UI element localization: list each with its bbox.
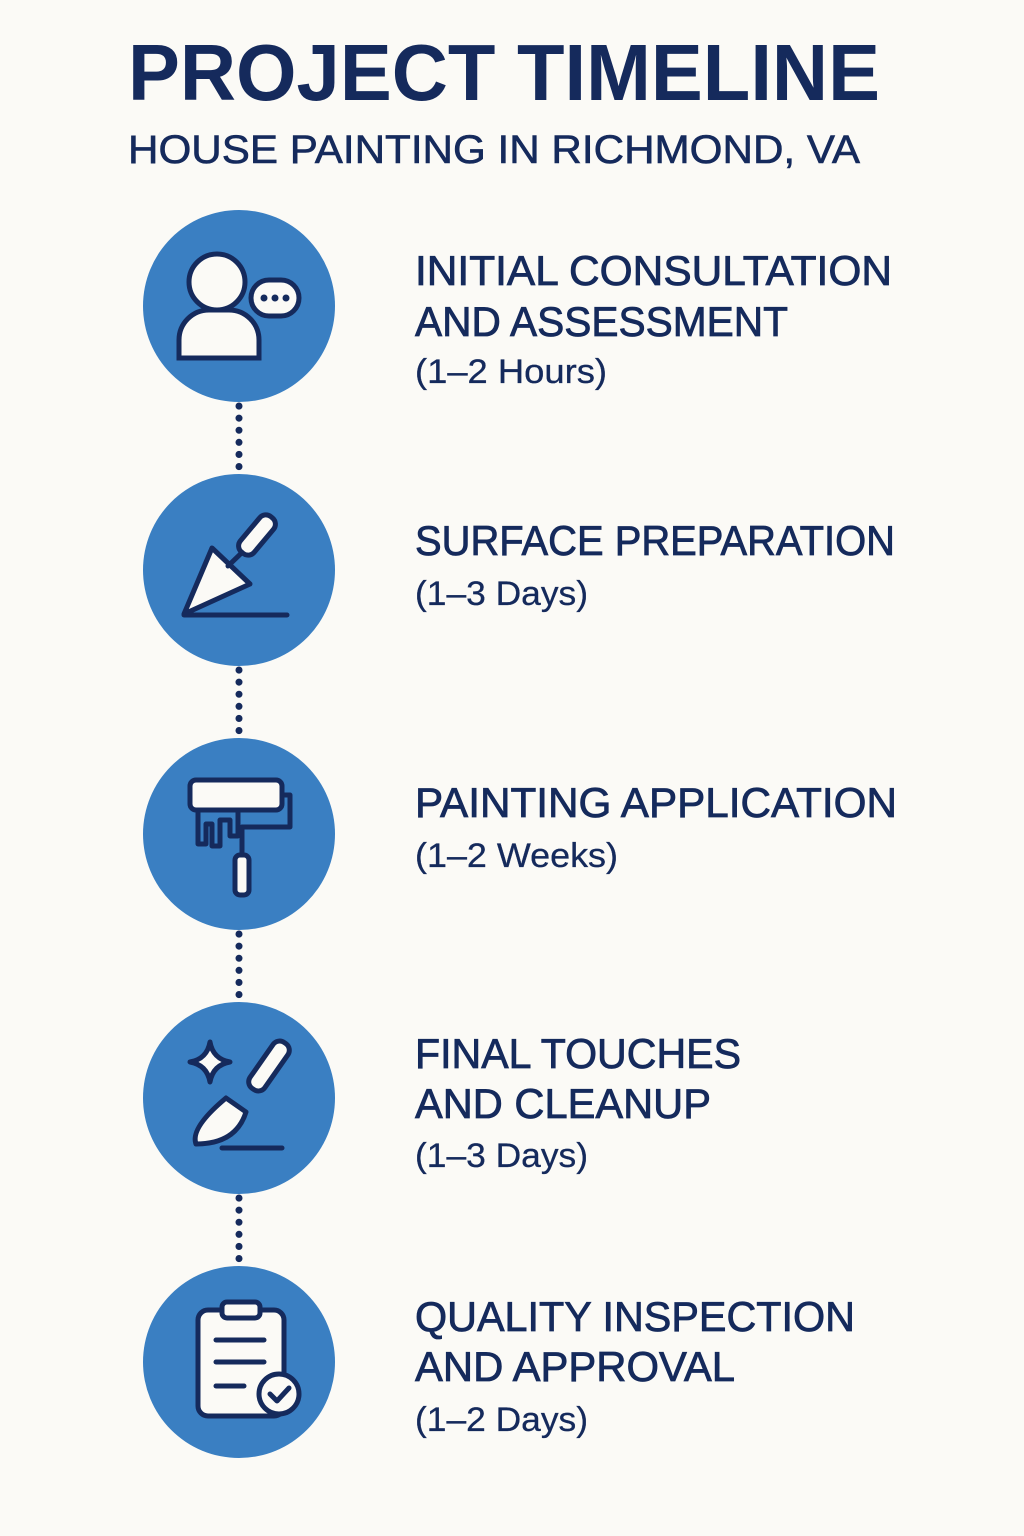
- step 2 text: SURFACE PREPARATION: [415, 517, 895, 564]
- step 4 text: (1–3 Days): [415, 1137, 588, 1175]
- step 5 text: (1–2 Days): [415, 1401, 588, 1439]
- icon: paint roller: [143, 738, 335, 930]
- step 3 text: (1–2 Weeks): [415, 837, 618, 875]
- icon: brush with sparkle: [143, 1002, 335, 1194]
- step 4 text: [415, 1030, 741, 1175]
- step 4 text: AND CLEANUP: [415, 1080, 711, 1127]
- subtitle: HOUSE PAINTING IN RICHMOND, VA: [128, 128, 860, 172]
- step 2 text: (1–3 Days): [415, 575, 588, 613]
- step 1 text: [415, 247, 892, 391]
- title: PROJECT TIMELINE: [128, 28, 880, 117]
- step 5 text: QUALITY INSPECTION: [415, 1293, 855, 1340]
- step 1 text: AND ASSESSMENT: [415, 298, 788, 345]
- step 2 text: [415, 517, 895, 613]
- step 3 text: [415, 779, 897, 875]
- step 5 text: [415, 1293, 855, 1439]
- timeline connector: [236, 406, 242, 1262]
- step 1 text: (1–2 Hours): [415, 353, 607, 391]
- icon: trowel: [143, 474, 335, 666]
- step 4 text: FINAL TOUCHES: [415, 1030, 741, 1077]
- step 3 text: PAINTING APPLICATION: [415, 779, 897, 826]
- step 1 text: INITIAL CONSULTATION: [415, 247, 892, 294]
- icon: consultation person with chat: [143, 210, 335, 402]
- icon: clipboard check: [143, 1266, 335, 1458]
- step 5 text: AND APPROVAL: [415, 1343, 735, 1390]
